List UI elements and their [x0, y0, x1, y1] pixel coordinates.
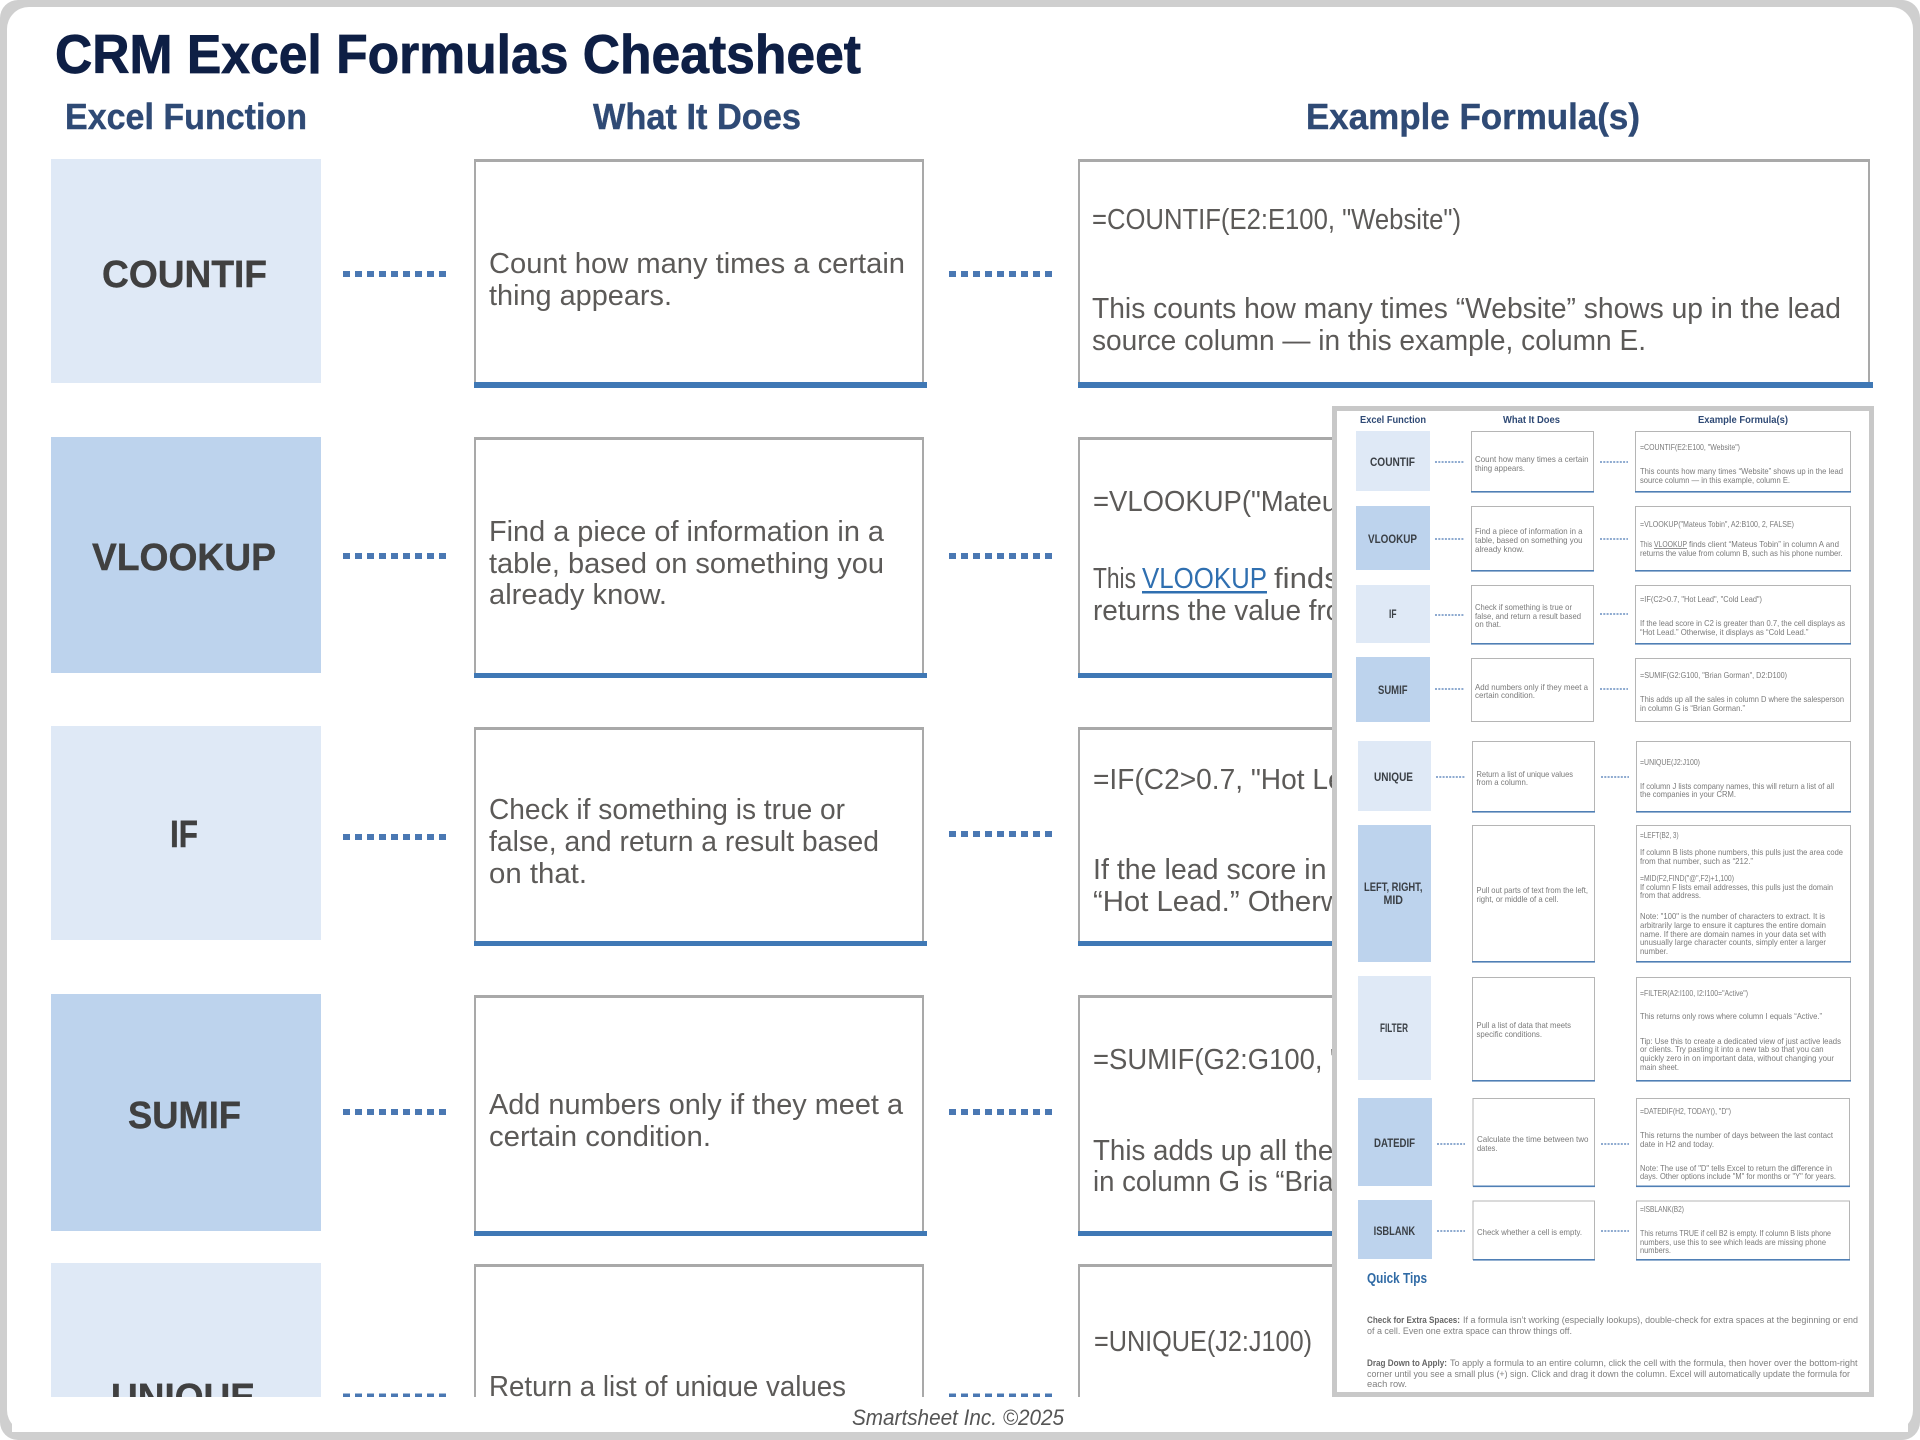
- inset row: IF: “Hot Lead.” Otherwise, it displays as “Cold Lead.”: [1640, 628, 1809, 637]
- inset row: COUNTIF: [1356, 431, 1851, 493]
- tip: Check for Extra Spaces: [1367, 1315, 1858, 1337]
- inset row: LEFT, RIGHT, MID: from that address.: [1640, 891, 1701, 900]
- inset row: ISBLANK: Check whether a cell is empty.: [1477, 1228, 1582, 1237]
- connector dots: [343, 271, 446, 277]
- formula box: This: [1093, 563, 1136, 595]
- description box: [474, 159, 927, 388]
- description box: Check if something is true or: [489, 794, 845, 826]
- inset row: SUMIF: =SUMIF(G2:G100, "Brian Gorman", D2:D100): [1640, 671, 1787, 680]
- heading: Excel Function: Excel Function: [65, 96, 307, 137]
- inset row: DATEDIF: Calculate the time between two: [1477, 1135, 1589, 1144]
- formula box: =VLOOKUP("Mateus Tobin", A2:B100, 2, FALSE): [1093, 486, 1693, 518]
- inset row: UNIQUE: =UNIQUE(J2:J100): [1640, 758, 1700, 767]
- inset row: DATEDIF: This returns the number of days between the last contact: [1640, 1131, 1834, 1140]
- inset row: IF: [1356, 585, 1851, 645]
- inset row: SUMIF: SUMIF: [1378, 685, 1408, 697]
- function box: VLOOKUP: VLOOKUP: [92, 537, 276, 579]
- inset row: DATEDIF: DATEDIF: [1374, 1138, 1415, 1150]
- inset row: LEFT, RIGHT, MID: =LEFT(B2, 3): [1640, 831, 1679, 840]
- inset row: VLOOKUP: VLOOKUP: [1368, 534, 1417, 546]
- inset row: SUMIF: in column G is “Brian Gorman.”: [1640, 704, 1745, 713]
- inset row: LEFT, RIGHT, MID: number.: [1640, 947, 1668, 956]
- formula box: [1078, 159, 1873, 388]
- inset row: FILTER: Pull a list of data that meets: [1476, 1021, 1571, 1030]
- inset row: SUMIF: Add numbers only if they meet a: [1475, 683, 1588, 692]
- inset row: LEFT, RIGHT, MID: LEFT, RIGHT,: [1364, 882, 1422, 894]
- formula box: =SUMIF(G2:G100, "Brian Gorman", D2:D100): [1093, 1044, 1653, 1076]
- description box: [474, 995, 927, 1236]
- bottom mask cropping the cut-off row: [12, 1397, 1908, 1432]
- inset row: VLOOKUP: returns the value from column B, such as his phone number.: [1640, 549, 1842, 558]
- description box: [474, 1264, 924, 1405]
- inset row: DATEDIF: [1358, 1098, 1850, 1187]
- function box: COUNTIF: [51, 159, 321, 383]
- row: SUMIF: [51, 994, 1873, 1236]
- title: CRM Excel Formulas Cheatsheet: [55, 23, 861, 85]
- tip: Drag Down to Apply: [1367, 1358, 1858, 1390]
- formula box: source column — in this example, column E.: [1092, 325, 1646, 357]
- inset row: COUNTIF: This counts how many times “Website” shows up in the lead: [1640, 467, 1843, 476]
- inset: Quick Tips: [1367, 1271, 1858, 1390]
- function box: SUMIF: [51, 994, 321, 1231]
- function box: COUNTIF: COUNTIF: [102, 254, 267, 296]
- panel: full-sheet inset preview: [1334, 408, 1872, 1394]
- inset headings: Example Formula(s): [1698, 414, 1788, 426]
- function box: UNIQUE: [51, 1263, 321, 1419]
- connector dots: [343, 1394, 446, 1398]
- description box: Count how many times a certain: [489, 248, 905, 280]
- inset row: VLOOKUP: finds client “Mateus Tobin” in column A and: [1689, 540, 1839, 549]
- inset headings: [1360, 414, 1788, 426]
- formula box: =COUNTIF(E2:E100, "Website"): [1092, 204, 1461, 236]
- inset row: SUMIF: This adds up all the sales in column D where the salesperson: [1640, 695, 1844, 704]
- inset row: VLOOKUP: already know.: [1475, 545, 1524, 554]
- inset row: FILTER: Tip: Use this to create a dedicated view of just active leads: [1640, 1037, 1841, 1046]
- function box: IF: IF: [170, 814, 198, 856]
- inset row: DATEDIF: date in H2 and today.: [1640, 1140, 1714, 1149]
- inset row: FILTER: specific conditions.: [1476, 1030, 1542, 1039]
- inset headings: What It Does: [1503, 414, 1560, 426]
- tip: Drag Down to Apply: Drag Down to Apply:: [1367, 1358, 1447, 1369]
- inset row: LEFT, RIGHT, MID: Pull out parts of text from the left,: [1476, 886, 1588, 895]
- inset row: ISBLANK: =ISBLANK(B2): [1640, 1205, 1684, 1214]
- description box: on that.: [489, 858, 587, 890]
- inset row: IF: on that.: [1475, 620, 1501, 629]
- inset row: IF: IF: [1389, 609, 1396, 621]
- inset row: UNIQUE: Return a list of unique values: [1476, 770, 1573, 779]
- inset row: LEFT, RIGHT, MID: If column B lists phone numbers, this pulls just the area code: [1640, 848, 1843, 857]
- description box: table, based on something you: [489, 548, 884, 580]
- inset row: FILTER: This returns only rows where column I equals “Active.”: [1640, 1012, 1822, 1021]
- tip: Drag Down to Apply: corner until you see a small plus (+) sign. Click and drag it down the column. Excel will automatically update the formula for: [1367, 1369, 1850, 1380]
- inset row: FILTER: FILTER: [1380, 1023, 1408, 1035]
- inset row: LEFT, RIGHT, MID: MID: [1384, 895, 1403, 907]
- inset row: LEFT, RIGHT, MID: =MID(F2,FIND("@",F2)+1,100): [1640, 874, 1734, 883]
- inset row: FILTER: [1358, 976, 1851, 1082]
- footer credit: Smartsheet Inc. ©2025: [852, 1405, 1065, 1430]
- connector dots: [949, 271, 1052, 277]
- inset row: FILTER: or clients. Try pasting it into a new tab so that you can: [1640, 1045, 1824, 1054]
- formula box: VLOOKUP: [1142, 563, 1267, 595]
- function box: VLOOKUP: [51, 437, 321, 673]
- formula box: This counts how many times “Website” shows up in the lead: [1092, 293, 1841, 325]
- description box: Return a list of unique values: [489, 1371, 846, 1403]
- inset row: IF: If the lead score in C2 is greater than 0.7, the cell displays as: [1640, 619, 1845, 628]
- inset row: DATEDIF: days. Other options include "M" for months or "Y" for years.: [1640, 1172, 1836, 1181]
- function box: IF: [51, 726, 321, 940]
- formula box: [1078, 437, 1873, 678]
- inset row: VLOOKUP: table, based on something you: [1475, 536, 1583, 545]
- inset row: VLOOKUP: VLOOKUP: [1654, 540, 1687, 549]
- inset row: LEFT, RIGHT, MID: If column F lists email addresses, this pulls just the domain: [1640, 883, 1833, 892]
- inset row: LEFT, RIGHT, MID: arbitrarily large to ensure it captures the entire domain: [1640, 921, 1826, 930]
- inset row: IF: =IF(C2>0.7, "Hot Lead", "Cold Lead"): [1640, 595, 1762, 604]
- inset row: IF: Check if something is true or: [1475, 603, 1572, 612]
- row: COUNTIF: [51, 159, 1873, 388]
- formula box: [1078, 727, 1873, 946]
- inset row: ISBLANK: [1358, 1200, 1850, 1261]
- inset row: LEFT, RIGHT, MID: right, or middle of a cell.: [1476, 895, 1558, 904]
- row: VLOOKUP: [51, 437, 1873, 678]
- inset row: IF: false, and return a result based: [1475, 612, 1581, 621]
- inset row: UNIQUE: [1358, 741, 1851, 813]
- description box: already know.: [489, 579, 667, 611]
- tip: Drag Down to Apply: To apply a formula to an entire column, click the cell with the formula, then hover over the bottom-right: [1450, 1358, 1858, 1369]
- formula box: [1078, 1264, 1870, 1405]
- inset row: FILTER: =FILTER(A2:I100, I2:I100="Active"): [1640, 989, 1748, 998]
- function box: SUMIF: SUMIF: [128, 1095, 241, 1137]
- heading: What It Does: What It Does: [593, 96, 801, 137]
- inset row: COUNTIF: thing appears.: [1475, 464, 1525, 473]
- connector dots: [949, 553, 1052, 559]
- formula box: returns the value from column B, such as his phone number.: [1093, 595, 1838, 627]
- inset row: VLOOKUP: =VLOOKUP("Mateus Tobin", A2:B100, 2, FALSE): [1640, 520, 1794, 529]
- inset row: LEFT, RIGHT, MID: name. If there are domain names in your data set with: [1640, 930, 1826, 939]
- formula box: =IF(C2>0.7, "Hot Lead", "Cold Lead"): [1093, 764, 1558, 796]
- inset row: LEFT, RIGHT, MID: from that number, such as “212.”: [1640, 857, 1753, 866]
- connector dots: [949, 1394, 1052, 1398]
- description box: [474, 437, 927, 678]
- inset row: COUNTIF: =COUNTIF(E2:E100, "Website"): [1640, 443, 1740, 452]
- inset row: SUMIF: certain condition.: [1475, 691, 1535, 700]
- heading: Example Formula(s): Example Formula(s): [1306, 96, 1640, 137]
- formula box: If the lead score in C2 is greater than 0.7, the cell displays as: [1093, 854, 1865, 886]
- formula box: =UNIQUE(J2:J100): [1094, 1326, 1312, 1358]
- connector dots: [949, 831, 1052, 837]
- Quick Tips heading: Quick Tips: [1367, 1271, 1427, 1287]
- tip: Check for Extra Spaces: of a cell. Even one extra space can throw things off.: [1367, 1326, 1572, 1337]
- inset row: LEFT, RIGHT, MID: Note: "100" is the number of characters to extract. It is: [1640, 912, 1825, 921]
- description box: Find a piece of information in a: [489, 516, 885, 548]
- tip: Check for Extra Spaces: Check for Extra Spaces:: [1367, 1315, 1460, 1326]
- inset row: ISBLANK: ISBLANK: [1374, 1226, 1416, 1238]
- inset row: ISBLANK: numbers.: [1640, 1246, 1671, 1255]
- inset row: VLOOKUP: [1356, 506, 1851, 572]
- inset row: UNIQUE: from a column.: [1476, 778, 1528, 787]
- row: UNIQUE (cropped): [51, 1263, 1870, 1419]
- inset row: COUNTIF: COUNTIF: [1370, 457, 1415, 469]
- formula box: This adds up all the sales in column D where the salesperson: [1093, 1135, 1846, 1167]
- connector dots: [343, 834, 446, 840]
- inset row: LEFT, RIGHT, MID: unusually large character counts, simply enter a larger: [1640, 938, 1826, 947]
- description box: Add numbers only if they meet a: [489, 1089, 904, 1121]
- formula box: in column G is “Brian Gorman.”: [1093, 1166, 1473, 1198]
- formula box: finds client “Mateus Tobin” in column A and: [1274, 563, 1864, 595]
- description box: certain condition.: [489, 1121, 711, 1153]
- inset row: DATEDIF: dates.: [1477, 1144, 1498, 1153]
- inset row: VLOOKUP: This: [1640, 540, 1652, 549]
- description box: false, and return a result based: [489, 826, 879, 858]
- inset row: UNIQUE: If column J lists company names, this will return a list of all: [1640, 782, 1834, 791]
- connector dots: [949, 1109, 1052, 1115]
- function box: UNIQUE: UNIQUE: [111, 1377, 255, 1419]
- inset row: FILTER: main sheet.: [1640, 1063, 1679, 1072]
- tip: Check for Extra Spaces: If a formula isn’t working (especially lookups), double-check for extra spaces at the beginning or end: [1463, 1315, 1858, 1326]
- column headings: [65, 96, 1640, 137]
- inset row: COUNTIF: source column — in this example, column E.: [1640, 476, 1790, 485]
- inset row: ISBLANK: This returns TRUE if cell B2 is empty. If column B lists phone: [1640, 1229, 1831, 1238]
- inset row: VLOOKUP: Find a piece of information in a: [1475, 527, 1583, 536]
- formula box: [1078, 995, 1873, 1236]
- inset row: LEFT, RIGHT, MID: [1358, 825, 1851, 963]
- tip: Drag Down to Apply: each row.: [1367, 1379, 1407, 1390]
- inset row: COUNTIF: Count how many times a certain: [1475, 455, 1589, 464]
- inset headings: Excel Function: [1360, 414, 1426, 426]
- connector dots: [343, 553, 446, 559]
- inset row: ISBLANK: numbers, use this to see which leads are missing phone: [1640, 1238, 1826, 1247]
- inset row: DATEDIF: Note: The use of "D" tells Excel to return the difference in: [1640, 1164, 1832, 1173]
- connector dots: [343, 1109, 446, 1115]
- inset row: UNIQUE: the companies in your CRM.: [1640, 790, 1736, 799]
- description box: [474, 727, 927, 946]
- formula box: “Hot Lead.” Otherwise, it displays as “Cold Lead.”: [1093, 886, 1733, 918]
- inset row: FILTER: quickly zero in on important data, without changing your: [1640, 1054, 1834, 1063]
- row: IF: [51, 726, 1873, 946]
- inset row: UNIQUE: UNIQUE: [1374, 772, 1413, 784]
- inset row: SUMIF: [1356, 657, 1850, 722]
- description box: thing appears.: [489, 280, 672, 312]
- inset row: DATEDIF: =DATEDIF(H2, TODAY(), "D"): [1640, 1107, 1731, 1116]
